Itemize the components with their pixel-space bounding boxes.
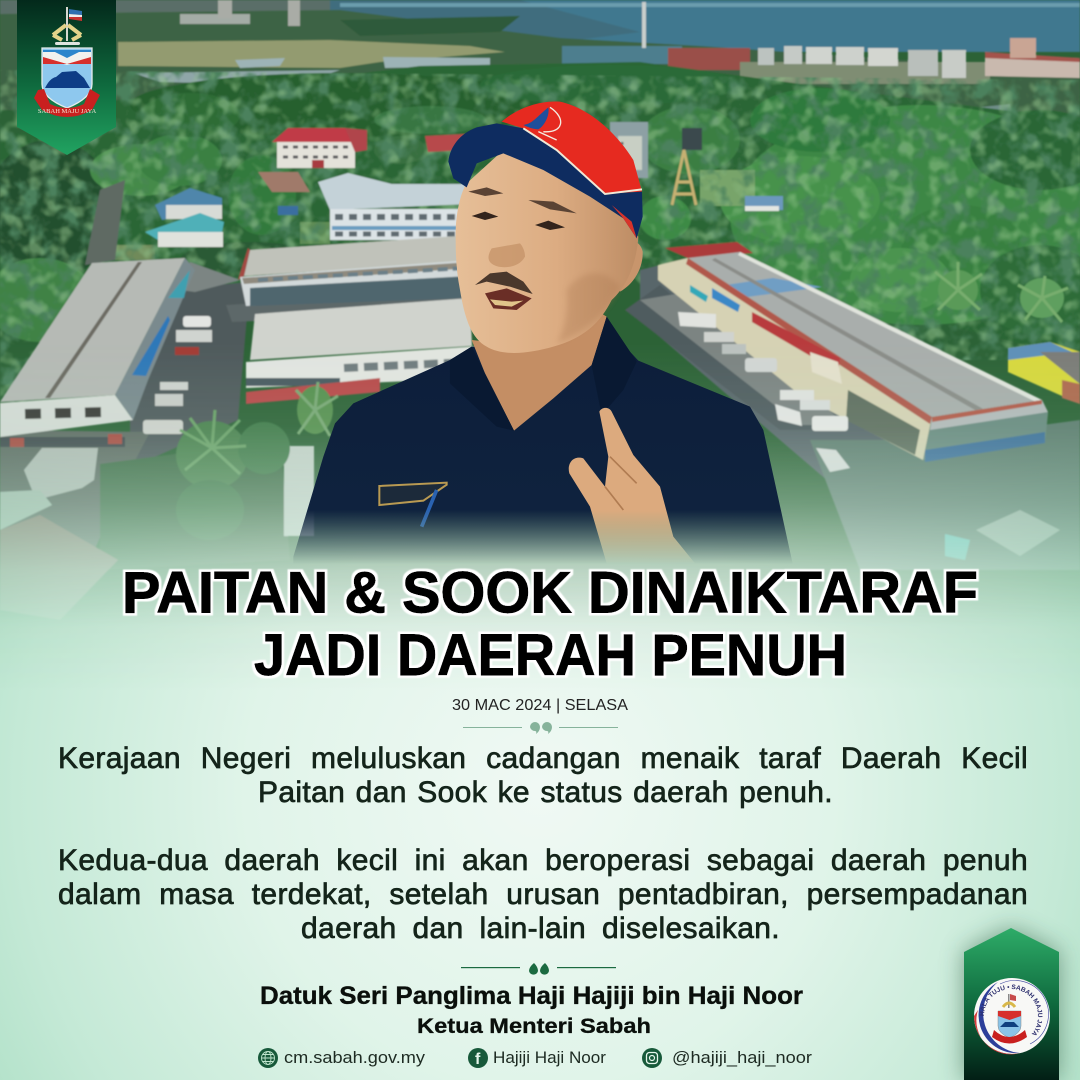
- body paragraph 2 line 2: dalam masa terdekat, setelah urusan pentadbiran, persempadanan: [58, 878, 1028, 911]
- eyes: [472, 212, 565, 230]
- left long shop block: [0, 258, 195, 447]
- contact: facebook: Hajiji Haji Noor: [493, 1049, 607, 1067]
- cap white trim: [523, 128, 642, 194]
- contact: instagram: @hajiji_haji_noor: [672, 1049, 813, 1067]
- author role: Ketua Menteri Sabah: [417, 1015, 651, 1038]
- opening quote divider: [463, 722, 618, 734]
- middle shop row: [238, 236, 470, 306]
- factory tanks and sheds: [562, 2, 1080, 84]
- contact: website: cm.sabah.gov.my: [284, 1049, 426, 1067]
- raised hand: [569, 408, 695, 563]
- body paragraph 2 line 3: daerah dan lain-lain diselesaikan.: [301, 912, 780, 945]
- banner: Hala Tuju crest, bottom right: [964, 928, 1059, 1080]
- eyebrows: [468, 187, 577, 213]
- red ribbon with motto: SABAH MAJU JAYA: [38, 108, 96, 115]
- moustache: [475, 272, 533, 294]
- contact: instagram: [642, 1048, 813, 1068]
- date line: 30 MAC 2024 | SELASA: [452, 697, 629, 714]
- cap brim and blue band: [448, 123, 643, 238]
- banner: Sabah state crest, top left: [17, 0, 116, 155]
- faded lower left structures and palms: [0, 262, 1068, 620]
- ear: [620, 241, 643, 292]
- cap side red patch: [612, 205, 637, 238]
- portrait: man in red cap and navy shirt: [293, 101, 793, 567]
- sea and bay at the top: [0, 0, 1080, 52]
- neck and open collar skin: [472, 307, 607, 431]
- flag: [66, 7, 82, 41]
- body paragraph 2 line 1: Kedua-dua daerah kecil ini akan beroperasi sebagai daerah penuh: [58, 844, 1028, 877]
- title: [122, 560, 978, 688]
- round badge: HALA TUJU • SABAH MAJU JAYA: [980, 984, 1042, 1036]
- title: JADI DAERAH PENUH: [254, 623, 847, 688]
- nose: [488, 243, 525, 267]
- cap logo: [523, 107, 549, 129]
- far right yellow house: [1008, 342, 1080, 404]
- closing quote divider: [461, 963, 616, 975]
- aerial photo background: town and forest: [0, 0, 1080, 634]
- red-roofed white building: [272, 122, 648, 178]
- shoreline land strip and ponds: [0, 0, 1080, 132]
- author name: Datuk Seri Panglima Haji Hajiji bin Haji Noor: [260, 982, 803, 1010]
- mini crest: [1008, 994, 1010, 1008]
- mouth: [485, 288, 532, 310]
- shirt: [293, 317, 793, 567]
- right collar: [592, 317, 637, 415]
- leaf texture on forest: [0, 70, 1080, 402]
- right long shop block: [658, 242, 1048, 462]
- crossed kris arms: [53, 25, 81, 40]
- mint gradient fade over the lower photo: [0, 378, 1080, 1080]
- pen: [422, 490, 437, 527]
- red cap crown: [502, 101, 642, 194]
- body paragraph 1 line 2: Paitan dan Sook ke status daerah penuh.: [258, 776, 833, 809]
- parked cars: [143, 312, 1060, 560]
- left collar: [450, 347, 514, 431]
- crest band: [55, 42, 80, 45]
- cheek shading: [560, 274, 620, 340]
- contact: website: [258, 1048, 426, 1068]
- contact: facebook: f: [475, 1051, 481, 1068]
- banner shadow, bottom right: [964, 928, 1059, 1080]
- body paragraph 1 line 1: Kerajaan Negeri meluluskan cadangan menaik taraf Daerah Kecil: [58, 742, 1028, 775]
- title: PAITAN & SOOK DINAIKTARAF: [122, 560, 978, 626]
- red ribbon with motto: [34, 89, 100, 117]
- shield: [42, 48, 92, 108]
- road and car park ground: [0, 180, 1080, 570]
- middle shop row lower: [246, 298, 480, 404]
- name badge: [379, 483, 447, 505]
- round badge: [974, 978, 1050, 1054]
- small left houses: [145, 128, 783, 247]
- blue-roofed block: [258, 172, 470, 240]
- face: [456, 150, 638, 353]
- forest clumps: [0, 62, 1080, 360]
